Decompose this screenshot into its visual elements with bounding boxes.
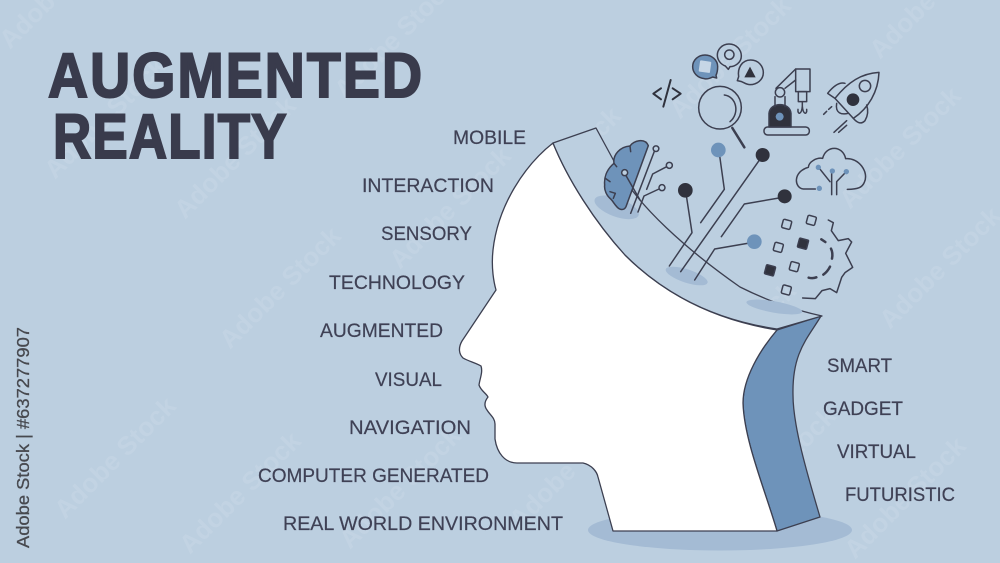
cut surface shadows (592, 191, 803, 317)
left keyword list: NAVIGATION (349, 417, 471, 439)
left keyword list: TECHNOLOGY (329, 272, 465, 294)
watermark pattern: Adobe Stock (668, 275, 802, 409)
watermark pattern: Adobe Stock (838, 430, 972, 563)
left keyword list: AUGMENTED (320, 320, 443, 342)
watermark pattern: Adobe Stock (173, 425, 307, 559)
head illustration (459, 128, 822, 531)
title (48, 40, 422, 172)
right keyword list: SMART (827, 355, 892, 377)
watermark pattern: Adobe Stock (833, 80, 967, 214)
watermark pattern: Adobe Stock (333, 420, 467, 554)
watermark pattern: Adobe Stock (48, 390, 182, 524)
right keyword list: GADGET (823, 398, 903, 420)
watermark pattern: Adobe Stock (543, 230, 677, 364)
watermark pattern: Adobe Stock (38, 50, 172, 184)
brain circuits (631, 151, 654, 213)
left keyword list: MOBILE (453, 127, 526, 149)
left keyword list: COMPUTER GENERATED (258, 465, 489, 487)
watermark pattern: Adobe Stock (503, 400, 637, 534)
watermark pattern: Adobe Stock (493, 100, 627, 234)
head face: white profile (459, 143, 777, 531)
watermark pattern: Adobe Stock (383, 140, 517, 274)
head top cut surface (553, 128, 822, 329)
stock credit: Adobe Stock | #637277907 (13, 327, 33, 548)
watermark pattern: Adobe Stock (708, 400, 842, 534)
right keyword list: VIRTUAL (837, 441, 916, 463)
head side: blue neck panel (743, 316, 821, 531)
icon: magnifier (699, 86, 744, 147)
icon: brain (605, 141, 672, 213)
watermark pattern: Adobe Stock (213, 220, 347, 354)
icon: cloud network (796, 148, 866, 195)
left keyword list: REAL WORLD ENVIRONMENT (283, 513, 563, 535)
watermark pattern: Adobe Stock (168, 90, 302, 224)
left keyword list: INTERACTION (362, 175, 494, 197)
title: REALITY (53, 102, 287, 172)
icon: rocket (824, 72, 879, 132)
left keyword list: VISUAL (375, 369, 442, 391)
head base shadow (588, 510, 852, 550)
icon: robot arm (764, 69, 810, 135)
right keyword list (823, 355, 955, 506)
left keyword list (258, 127, 563, 535)
icon: circuit pins (669, 143, 792, 280)
right keyword list: FUTURISTIC (845, 484, 955, 506)
icon: gear with squares (764, 215, 853, 299)
title: AUGMENTED (48, 40, 422, 111)
icon: chat bubbles (693, 44, 763, 85)
left keyword list: SENSORY (381, 223, 472, 245)
icon: code brackets (653, 80, 681, 107)
